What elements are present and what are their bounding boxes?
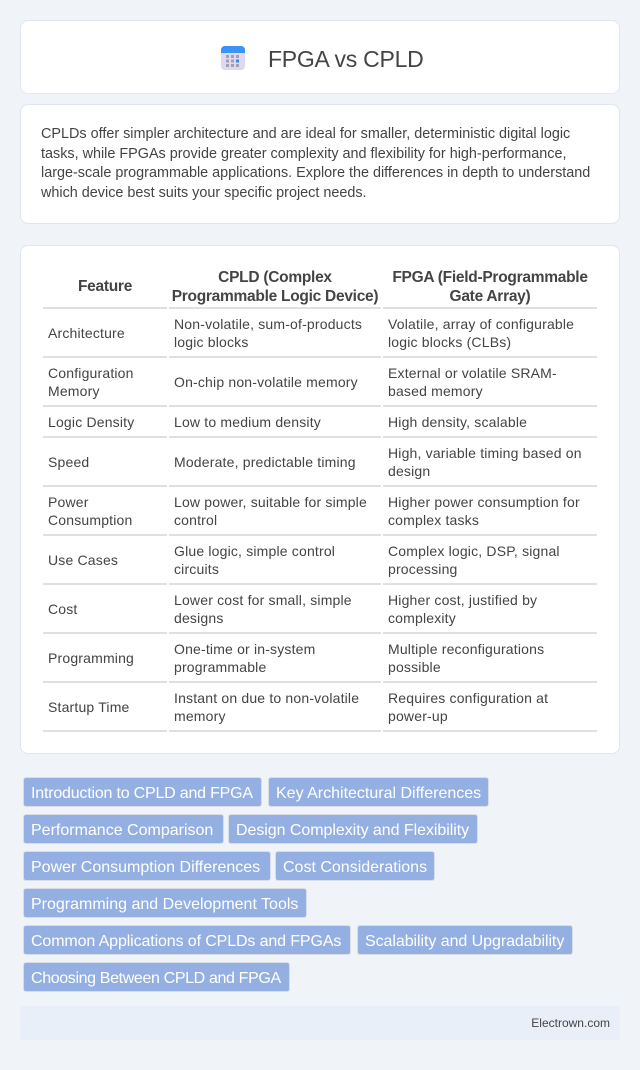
- tag: [228, 814, 478, 844]
- table header: Feature: Feature: [78, 278, 132, 294]
- row: Configuration Memory: [48, 365, 134, 399]
- Cost FPGA: complexity: [388, 610, 456, 626]
- header card: [20, 20, 620, 94]
- Use Cases CPLD: Glue logic, simple control: [174, 543, 335, 559]
- table header: CPLD: [172, 269, 378, 305]
- row: Power Consumption: Power: [48, 494, 89, 510]
- Logic Density FPGA: High density, scalable: [388, 414, 527, 430]
- intro paragraph: which device best suits your specific project needs.: [41, 184, 367, 200]
- Power Consumption FPGA: Higher power consumption for: [388, 494, 580, 510]
- tag: Common Applications of CPLDs and FPGAs: [31, 933, 341, 950]
- tag: [23, 814, 224, 844]
- Configuration Memory FPGA: External or volatile SRAM-: [388, 365, 557, 381]
- row: Configuration Memory: Configuration: [48, 365, 134, 381]
- intro paragraph: CPLDs offer simpler architecture and are ideal for smaller, deterministic digital logic: [41, 126, 570, 142]
- tag: [23, 925, 351, 955]
- Architecture CPLD: [174, 316, 362, 350]
- tag: [23, 851, 271, 881]
- Programming CPLD: One-time or in-system: [174, 641, 315, 657]
- Power Consumption FPGA: complex tasks: [388, 512, 479, 528]
- Configuration Memory CPLD: On-chip non-volatile memory: [174, 374, 358, 390]
- Use Cases FPGA: [388, 543, 560, 577]
- Use Cases CPLD: circuits: [174, 561, 219, 577]
- tag: [275, 851, 435, 881]
- tag: Design Complexity and Flexibility: [236, 822, 469, 839]
- Cost CPLD: [174, 592, 352, 626]
- Logic Density CPLD: Low to medium density: [174, 414, 321, 430]
- Startup Time CPLD: [174, 690, 359, 724]
- tag: [268, 777, 489, 807]
- tag: Key Architectural Differences: [276, 785, 481, 802]
- Power Consumption FPGA: [388, 494, 580, 528]
- Architecture CPLD: logic blocks: [174, 334, 249, 350]
- Architecture FPGA: logic blocks (CLBs): [388, 334, 511, 350]
- Startup Time CPLD: Instant on due to non-volatile: [174, 690, 359, 706]
- Cost CPLD: designs: [174, 610, 224, 626]
- Architecture FPGA: [388, 316, 574, 350]
- row: Power Consumption: Consumption: [48, 512, 132, 528]
- Speed FPGA: High, variable timing based on: [388, 445, 582, 461]
- tag: [23, 888, 307, 918]
- tag: [357, 925, 573, 955]
- Configuration Memory FPGA: [388, 365, 557, 399]
- row: Programming: Programming: [48, 650, 134, 666]
- Startup Time FPGA: Requires configuration at: [388, 690, 548, 706]
- tag: Performance Comparison: [31, 822, 213, 839]
- tag: Programming and Development Tools: [31, 896, 298, 913]
- table header: FPGA: [392, 269, 588, 305]
- row: Configuration Memory: Memory: [48, 383, 100, 399]
- Architecture CPLD: Non-volatile, sum-of-products: [174, 316, 362, 332]
- row: Logic Density: Logic Density: [48, 414, 134, 430]
- tag: [23, 777, 262, 807]
- Speed CPLD: Moderate, predictable timing: [174, 454, 356, 470]
- Startup Time FPGA: power-up: [388, 708, 448, 724]
- Architecture FPGA: Volatile, array of configurable: [388, 316, 574, 332]
- row: Cost: Cost: [48, 601, 78, 617]
- row: Speed: Speed: [48, 454, 89, 470]
- tag: [23, 962, 290, 992]
- table header: FPGA: Gate Array): [450, 288, 530, 305]
- tag: Introduction to CPLD and FPGA: [31, 785, 253, 802]
- row: Startup Time: Startup Time: [48, 699, 130, 715]
- table header: FPGA: FPGA (Field-Programmable: [392, 269, 588, 286]
- Programming FPGA: Multiple reconfigurations: [388, 641, 544, 657]
- Programming CPLD: programmable: [174, 659, 266, 675]
- Power Consumption CPLD: control: [174, 512, 217, 528]
- Speed FPGA: [388, 445, 582, 479]
- intro text panel: [20, 104, 620, 224]
- tag: Cost Considerations: [283, 859, 427, 876]
- intro paragraph: [41, 126, 590, 200]
- intro paragraph: large-scale programmable applications. Explore the differences in depth to understand: [41, 165, 590, 181]
- Use Cases CPLD: [174, 543, 335, 577]
- Startup Time FPGA: [388, 690, 548, 724]
- tag: Power Consumption Differences: [31, 859, 260, 876]
- Cost CPLD: Lower cost for small, simple: [174, 592, 352, 608]
- Power Consumption CPLD: Low power, suitable for simple: [174, 494, 367, 510]
- row: Use Cases: Use Cases: [48, 552, 118, 568]
- table header: CPLD: Programmable Logic Device): [172, 288, 378, 305]
- table header: CPLD: CPLD (Complex: [218, 269, 332, 286]
- footer: Electrown.com: [531, 1016, 610, 1030]
- tag: Choosing Between CPLD and FPGA: [31, 970, 281, 987]
- Cost FPGA: Higher cost, justified by: [388, 592, 537, 608]
- Power Consumption CPLD: [174, 494, 367, 528]
- footer: [20, 1006, 620, 1040]
- Configuration Memory FPGA: based memory: [388, 383, 483, 399]
- Use Cases FPGA: processing: [388, 561, 458, 577]
- row: Power Consumption: [48, 494, 132, 528]
- tag: Scalability and Upgradability: [365, 933, 564, 950]
- Programming FPGA: [388, 641, 544, 675]
- Use Cases FPGA: Complex logic, DSP, signal: [388, 543, 560, 559]
- title: FPGA vs CPLD: [268, 46, 423, 72]
- icon: calendar grid: [221, 46, 245, 70]
- intro paragraph: tasks, while FPGAs provide greater complexity and flexibility for high-performance,: [41, 146, 566, 162]
- comparison table panel: [20, 245, 620, 754]
- Programming CPLD: [174, 641, 315, 675]
- Startup Time CPLD: memory: [174, 708, 226, 724]
- Speed FPGA: design: [388, 463, 430, 479]
- Cost FPGA: [388, 592, 537, 626]
- row: Architecture: Architecture: [48, 325, 125, 341]
- Programming FPGA: possible: [388, 659, 441, 675]
